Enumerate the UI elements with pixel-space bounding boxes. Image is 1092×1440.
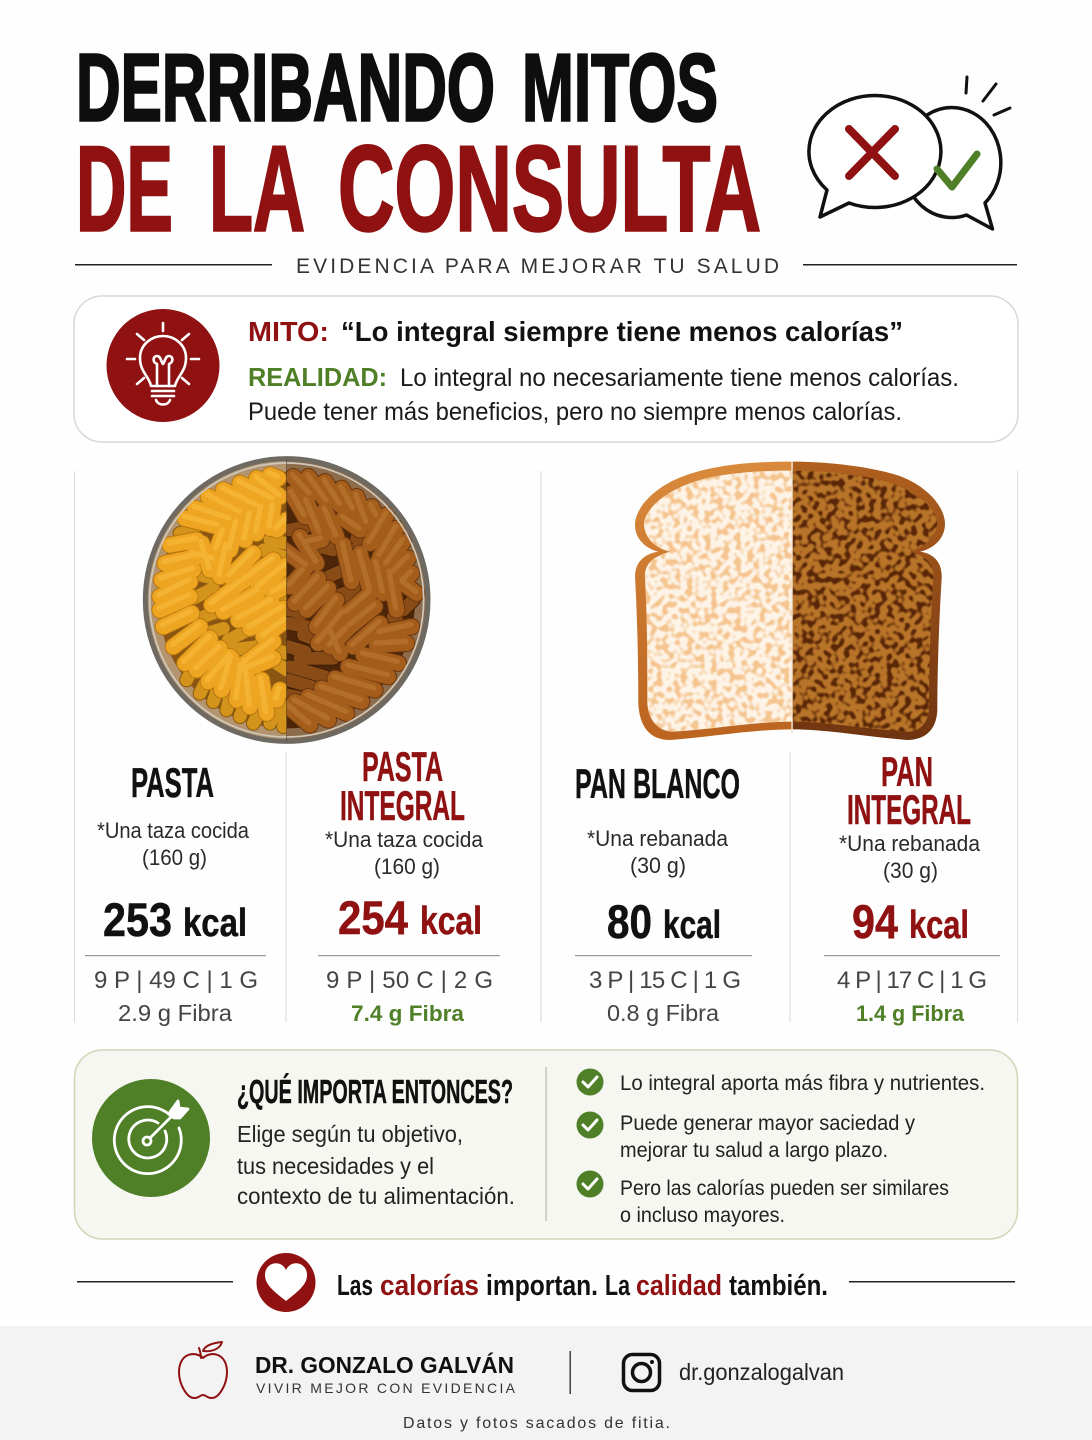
title: CONSULTA — [338, 120, 761, 256]
column: pasta integral: 7.4 g Fibra — [351, 1001, 465, 1026]
tagline: también. — [729, 1270, 828, 1302]
title: LA — [209, 120, 305, 256]
column: pasta: kcal — [183, 902, 247, 945]
column: pan blanco: *Una rebanada — [587, 826, 729, 851]
check item 3: o incluso mayores. — [620, 1204, 785, 1227]
brown fusilli — [279, 475, 417, 725]
reality statement: Lo integral no necesariamente tiene menos calorías. — [400, 364, 959, 392]
column: pasta: (160 g) — [142, 845, 207, 870]
myth statement: MITO: — [248, 316, 329, 347]
column: pan blanco — [575, 760, 752, 1026]
check item 2: Puede generar mayor saciedad y — [620, 1112, 915, 1135]
check item 3 — [576, 1170, 949, 1227]
icon: target — [92, 1079, 210, 1197]
icon: light bulb — [106, 309, 220, 422]
yellow fusilli — [159, 473, 290, 727]
title: DE — [76, 120, 173, 256]
icon: apple — [179, 1342, 227, 1398]
footer — [0, 1326, 1092, 1440]
column: pan integral: 94 — [852, 895, 898, 948]
image: bread slice split in two — [635, 462, 945, 740]
author name: DR. GONZALO GALVÁN — [255, 1351, 514, 1378]
column: pan blanco: 0.8 g Fibra — [607, 1000, 719, 1026]
column: pan integral: 1.4 g Fibra — [856, 1001, 965, 1026]
column: pasta integral: *Una taza cocida — [325, 827, 484, 852]
column: pan blanco: 80 — [607, 895, 652, 948]
check item 3: Pero las calorías pueden ser similares — [620, 1177, 949, 1200]
column: pasta: 253 — [103, 893, 172, 946]
list: benefits — [576, 1068, 985, 1227]
column dividers — [74, 471, 1018, 1022]
icon: instagram — [624, 1354, 660, 1390]
title: DERRIBANDO — [76, 34, 495, 142]
column: pasta integral: (160 g) — [374, 854, 440, 879]
column: pan blanco: kcal — [663, 904, 721, 947]
column: pan blanco: (30 g) — [630, 853, 686, 878]
check item 2: mejorar tu salud a largo plazo. — [620, 1139, 888, 1162]
data source: Datos y fotos sacados de fitia. — [403, 1415, 670, 1432]
tagline: calorías — [380, 1270, 479, 1302]
column: pan integral: 4 P | 17 C | 1 G — [837, 967, 987, 994]
icon: speech bubbles with cross and check — [809, 77, 1010, 229]
reality statement: Puede tener más beneficios, pero no siempre menos calorías. — [248, 398, 902, 426]
column: pasta integral: INTEGRAL — [340, 782, 465, 829]
myth statement: “Lo integral siempre tiene menos calorías” — [341, 316, 903, 347]
title: MITOS — [522, 34, 718, 142]
text: question: ¿QUÉ IMPORTA ENTONCES? — [237, 1073, 513, 1110]
subtitle with rules: EVIDENCIA PARA MEJORAR TU SALUD — [296, 255, 779, 278]
column: pan integral — [824, 748, 1000, 1026]
column: pasta integral: 254 — [338, 891, 408, 944]
tagline: importan. — [486, 1270, 598, 1302]
tagline: calidad — [636, 1270, 722, 1302]
check item 2 — [576, 1112, 915, 1162]
author name: VIVIR MEJOR CON EVIDENCIA — [256, 1380, 516, 1396]
icon: heart — [256, 1253, 316, 1312]
column: pasta integral — [318, 743, 500, 1026]
instagram handle: dr.gonzalogalvan — [679, 1359, 844, 1385]
column: pan integral: *Una rebanada — [839, 831, 981, 856]
text: question: contexto de tu alimentación. — [237, 1183, 515, 1209]
text: question: tus necesidades y el — [237, 1153, 434, 1179]
column: pasta: 9 P | 49 C | 1 G — [94, 967, 258, 994]
column: pan integral: PAN — [881, 748, 933, 795]
tagline: La — [605, 1270, 631, 1302]
reality statement: REALIDAD: — [248, 362, 387, 392]
panel: myth and reality — [74, 296, 1018, 442]
column: pan blanco: PAN BLANCO — [575, 760, 740, 807]
column: pasta integral: PASTA — [362, 743, 443, 790]
column: pan integral: INTEGRAL — [847, 786, 971, 833]
column: pasta integral: 9 P | 50 C | 2 G — [326, 967, 493, 994]
column: pasta: *Una taza cocida — [97, 818, 250, 843]
column: pasta — [85, 759, 266, 1026]
column: pan integral: (30 g) — [883, 858, 938, 883]
tagline — [77, 1253, 1015, 1312]
text: question: Elige según tu objetivo, — [237, 1121, 463, 1147]
reality statement — [248, 362, 959, 426]
column: pan integral: kcal — [909, 904, 969, 947]
column: pasta: 2.9 g Fibra — [118, 1000, 232, 1026]
column: pan blanco: 3 P | 15 C | 1 G — [589, 967, 741, 994]
column: pasta: PASTA — [131, 759, 214, 806]
title — [76, 34, 761, 256]
author name — [255, 1351, 516, 1396]
text: question — [237, 1073, 515, 1209]
tagline: Las — [337, 1270, 373, 1302]
check item 1: Lo integral aporta más fibra y nutrientes. — [620, 1072, 985, 1095]
image: pasta bowl split in two — [145, 459, 428, 741]
panel: what matters — [74, 1050, 1018, 1239]
column: pasta integral: kcal — [420, 900, 482, 943]
